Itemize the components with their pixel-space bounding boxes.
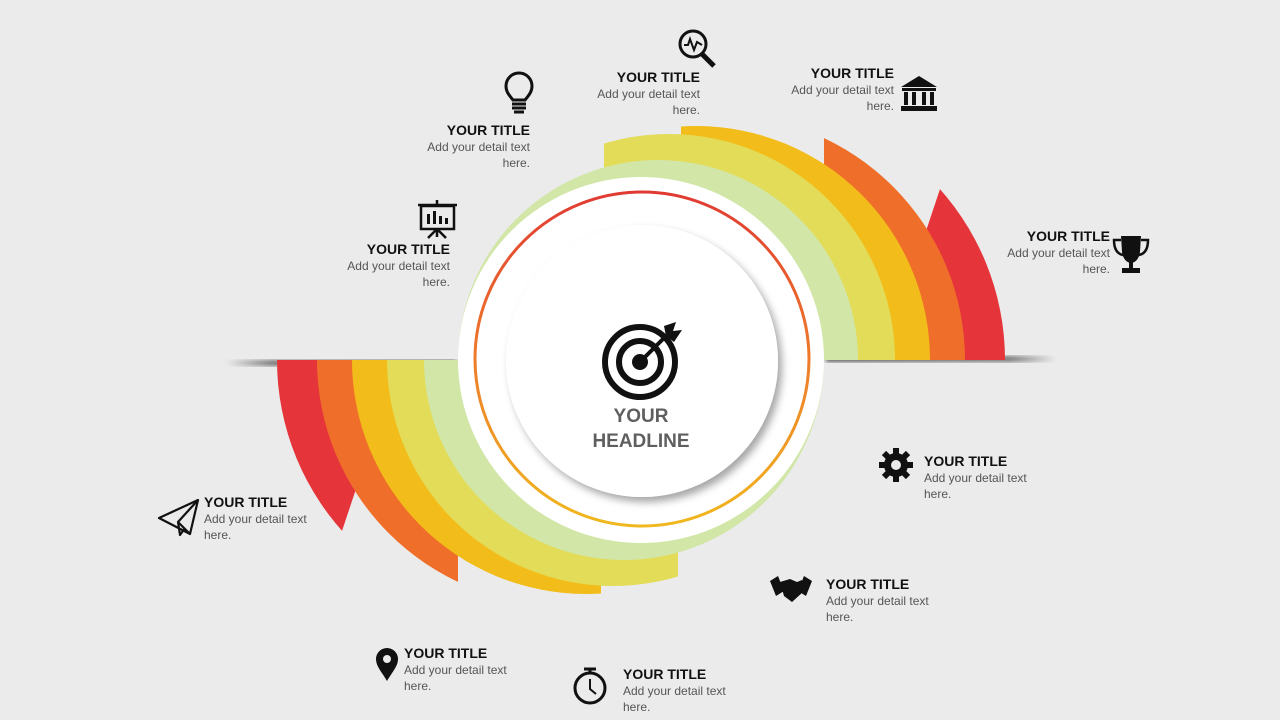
text: stopwatch: here.	[623, 700, 650, 714]
text: presentation: Add your detail text	[347, 259, 450, 273]
upper band group	[443, 103, 1005, 617]
shadow strips	[226, 356, 1056, 366]
text: handshake: YOUR TITLE	[826, 576, 909, 592]
text: bank: YOUR TITLE	[811, 65, 894, 81]
text: pin: Add your detail text	[404, 663, 507, 677]
text: handshake: Add your detail text	[826, 594, 929, 608]
text: trophy: here.	[1083, 262, 1110, 276]
text: stopwatch	[623, 666, 726, 714]
white disc	[458, 177, 824, 543]
text: paper plane: here.	[204, 528, 231, 542]
text: trophy	[1007, 228, 1110, 276]
text: bank	[791, 65, 894, 113]
lower band group	[277, 103, 839, 617]
text: presentation: here.	[423, 275, 450, 289]
text: lightbulb: Add your detail text	[427, 140, 530, 154]
icon: map pin	[376, 648, 398, 681]
icon: bank	[901, 76, 937, 111]
headline: YOUR	[614, 406, 668, 427]
icon: lightbulb	[506, 73, 532, 112]
gradient ring	[475, 192, 809, 526]
text: magnifier	[597, 69, 700, 117]
text: pin: YOUR TITLE	[404, 645, 487, 661]
text: trophy: Add your detail text	[1007, 246, 1110, 260]
text: bank: Add your detail text	[791, 83, 894, 97]
icon: stopwatch	[575, 669, 605, 703]
icon: presentation board	[418, 200, 457, 238]
text: lightbulb	[427, 122, 530, 170]
text: lightbulb: here.	[503, 156, 530, 170]
icon: magnifier	[680, 31, 714, 66]
text: lightbulb: YOUR TITLE	[447, 122, 530, 138]
icon: paper plane	[159, 500, 198, 535]
text: magnifier: Add your detail text	[597, 87, 700, 101]
text: gear: here.	[924, 487, 951, 501]
text: paper plane: YOUR TITLE	[204, 494, 287, 510]
icon: target	[605, 322, 682, 397]
text: bank: here.	[867, 99, 894, 113]
text: paper plane: Add your detail text	[204, 512, 307, 526]
text: paper plane	[204, 494, 307, 542]
text: pin: here.	[404, 679, 431, 693]
headline	[592, 406, 690, 452]
main graphic	[158, 30, 1150, 704]
icon: gear	[879, 448, 913, 482]
text: gear	[924, 453, 1027, 501]
icon: handshake	[770, 576, 812, 602]
text: handshake	[826, 576, 929, 624]
icon: trophy	[1114, 236, 1148, 273]
text: stopwatch: Add your detail text	[623, 684, 726, 698]
text: stopwatch: YOUR TITLE	[623, 666, 706, 682]
inner circle	[506, 225, 778, 497]
text: gear: YOUR TITLE	[924, 453, 1007, 469]
text: handshake: here.	[826, 610, 853, 624]
text: magnifier: YOUR TITLE	[617, 69, 700, 85]
headline: HEADLINE	[592, 431, 690, 452]
text: gear: Add your detail text	[924, 471, 1027, 485]
text: pin	[404, 645, 507, 693]
text: trophy: YOUR TITLE	[1027, 228, 1110, 244]
text: magnifier: here.	[673, 103, 700, 117]
text: presentation: YOUR TITLE	[367, 241, 450, 257]
text: presentation	[347, 241, 450, 289]
